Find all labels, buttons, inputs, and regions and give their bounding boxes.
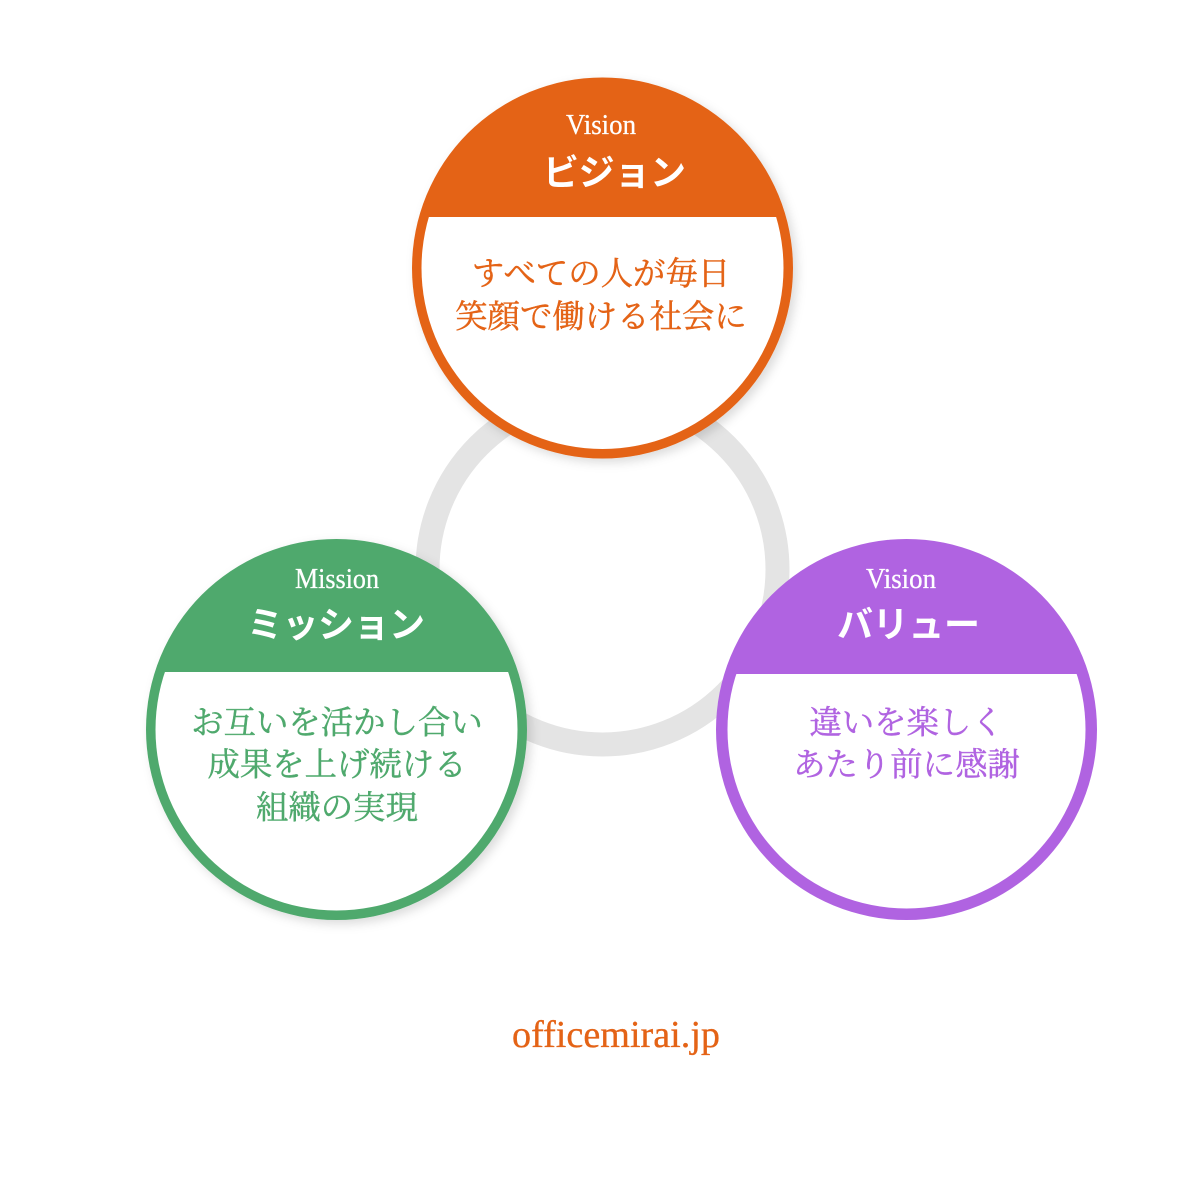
mission english label: Mission	[295, 563, 379, 595]
value heading: バリュー	[837, 604, 980, 645]
central connecting ring	[428, 394, 778, 744]
mission heading: ミッション	[247, 604, 425, 645]
mission circle body	[130, 539, 530, 922]
panel: value circle	[710, 539, 1110, 924]
vision statement: すべての人が毎日	[472, 256, 730, 292]
mission statement: 組織の実現	[256, 790, 418, 826]
vision circle body	[400, 78, 800, 458]
mission statement: お互いを活かし合い	[191, 704, 483, 742]
website url: officemirai.jp	[512, 1014, 720, 1056]
mission statement: 成果を上げ続ける	[207, 746, 467, 784]
value english label: Vision	[866, 563, 936, 595]
value circle body	[710, 539, 1110, 924]
vision heading: ビジョン	[543, 152, 686, 193]
value statement: あたり前に感謝	[793, 746, 1020, 784]
value statement: 違いを楽しく	[809, 704, 1004, 742]
panel: mission circle	[130, 539, 530, 922]
vision statement: 笑顔で働ける社会に	[455, 298, 747, 336]
vision english label: Vision	[566, 109, 636, 141]
panel: vision circle	[400, 78, 800, 458]
